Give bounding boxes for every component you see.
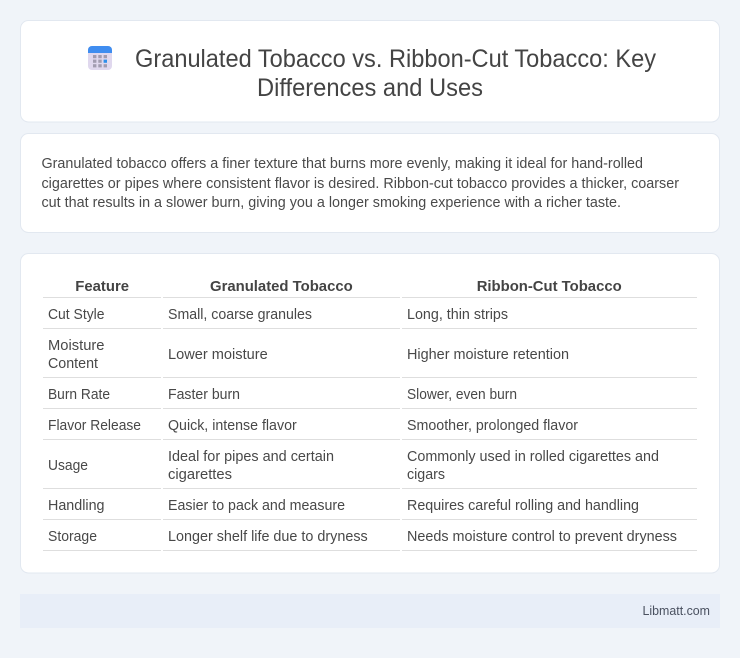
row: burn rate: Slower, even burn — [407, 387, 517, 403]
row: burn rate: Burn Rate — [48, 387, 110, 403]
table header row: Granulated Tobacco — [210, 278, 353, 295]
footer brand text: Libmatt.com — [642, 604, 710, 618]
row: cut style: Small, coarse granules — [168, 307, 312, 323]
summary text: cut that results in a slower burn, giving you a longer smoking experience with a richer taste. — [42, 194, 621, 211]
row: burn rate: Faster burn — [168, 387, 240, 403]
title: Granulated Tobacco vs. Ribbon-Cut Tobacco: Key — [135, 45, 656, 73]
table rules — [43, 298, 697, 550]
row: handling — [48, 498, 639, 514]
row: handling: Handling — [48, 498, 104, 514]
row: flavor release: Smoother, prolonged flavor — [407, 418, 578, 434]
summary text: Granulated tobacco offers a finer texture that burns more evenly, making it ideal for hand-rolled — [42, 155, 643, 172]
table header row: Feature — [75, 278, 129, 295]
row: flavor release: Flavor Release — [48, 418, 141, 434]
row: moisture content — [48, 338, 569, 372]
row: cut style — [48, 307, 508, 323]
panel: title header — [20, 20, 720, 122]
row: usage: Commonly used in rolled cigarettes and — [407, 449, 659, 465]
title — [135, 45, 656, 102]
row: moisture content: Higher moisture retention — [407, 347, 569, 363]
row: flavor release: Quick, intense flavor — [168, 418, 297, 434]
row: handling: Requires careful rolling and handling — [407, 498, 639, 514]
summary text: cigarettes or pipes where consistent flavor is desired. Ribbon-cut tobacco provides a thicker, coarser — [42, 175, 679, 192]
icon: calendar grid — [88, 46, 112, 70]
row: usage: Usage — [48, 458, 88, 474]
row: usage: cigarettes — [168, 467, 232, 483]
row: handling: Easier to pack and measure — [168, 498, 345, 514]
footer bar — [20, 594, 720, 628]
row: usage: Ideal for pipes and certain — [168, 449, 334, 465]
row: storage: Longer shelf life due to dryness — [168, 529, 368, 545]
row: flavor release — [48, 418, 578, 434]
title: Differences and Uses — [257, 74, 483, 102]
row: storage — [48, 529, 677, 545]
row: moisture content: Content — [48, 356, 98, 372]
row: usage: cigars — [407, 467, 445, 483]
row: usage — [48, 449, 659, 483]
row: burn rate — [48, 387, 517, 403]
panel: comparison table — [20, 254, 720, 573]
summary text — [42, 155, 679, 211]
panel: summary — [20, 134, 720, 232]
row: storage: Needs moisture control to prevent dryness — [407, 529, 677, 545]
table header row: Ribbon-Cut Tobacco — [477, 278, 622, 295]
row: cut style: Long, thin strips — [407, 307, 508, 323]
row: moisture content: Lower moisture — [168, 347, 268, 363]
row: moisture content: Moisture — [48, 338, 104, 354]
table header row — [75, 278, 622, 295]
row: storage: Storage — [48, 529, 97, 545]
row: cut style: Cut Style — [48, 307, 104, 323]
